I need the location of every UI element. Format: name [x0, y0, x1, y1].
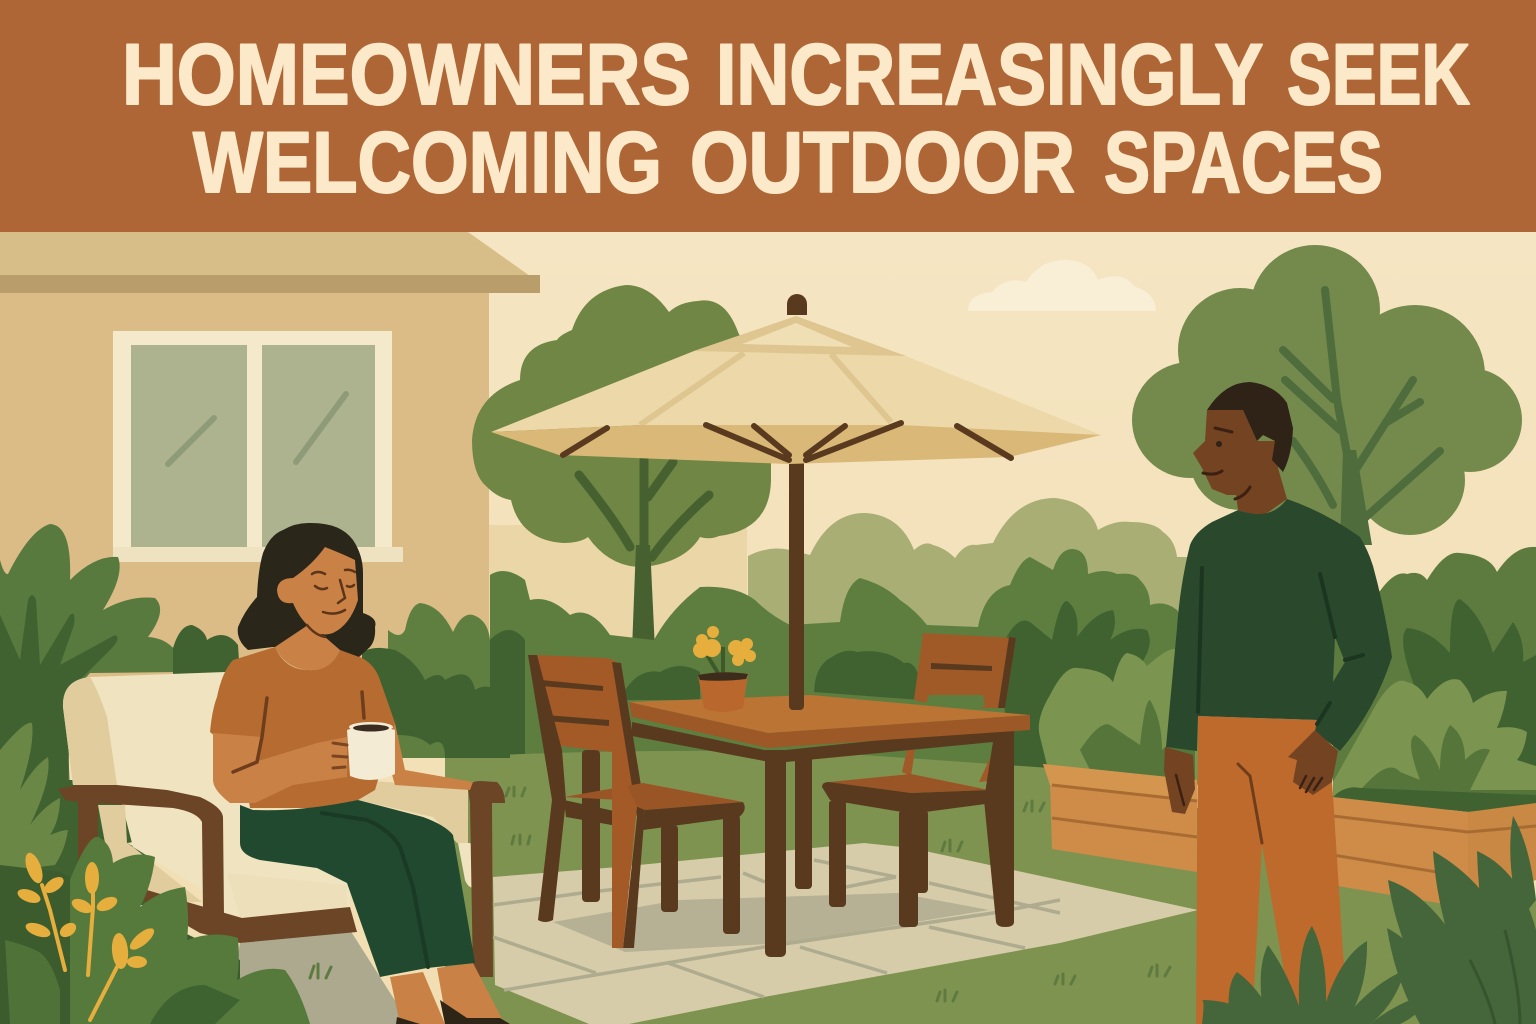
tree behind umbrella — [472, 285, 771, 650]
hair — [238, 523, 376, 658]
chair back — [914, 633, 1016, 708]
mug — [347, 722, 395, 780]
title banner — [0, 0, 1536, 232]
foreground plants right — [1202, 816, 1536, 1024]
foreground plants left — [0, 837, 310, 1024]
table top — [629, 695, 1030, 733]
woman — [210, 523, 510, 1024]
patio — [493, 843, 1198, 1024]
left bushes — [0, 524, 240, 905]
roof fascia — [0, 275, 540, 293]
raised planter beds — [1043, 764, 1536, 905]
light bush left of man — [1039, 649, 1200, 785]
table edge — [629, 702, 1030, 748]
dark leaves on right hedge — [1403, 599, 1536, 810]
right hedge — [1333, 547, 1536, 810]
hair — [1207, 382, 1293, 472]
armchair frame — [58, 785, 224, 917]
yellow sprigs — [16, 851, 157, 1020]
facial features — [307, 570, 355, 637]
bush beside woman — [362, 603, 510, 758]
head and neck — [1193, 410, 1287, 518]
trousers — [1196, 716, 1350, 1024]
man standing — [1164, 382, 1392, 1024]
title: OUTDOOR — [690, 115, 1075, 211]
concrete path at lower left — [225, 930, 410, 1024]
facial features — [1203, 428, 1250, 499]
sweater — [1166, 499, 1392, 751]
flower pot — [693, 626, 756, 712]
shirt seams — [233, 692, 364, 772]
table — [582, 690, 1030, 957]
arm far — [385, 723, 473, 790]
title: SEEK — [1287, 27, 1470, 123]
house wall — [0, 292, 489, 692]
title: SPACES — [1104, 115, 1383, 211]
table shadow — [553, 893, 989, 952]
sky background — [0, 232, 1536, 1024]
dark shrubs behind table — [490, 601, 1195, 770]
cloud — [968, 260, 1156, 311]
annex wall — [489, 525, 747, 665]
distant pale hedge — [748, 498, 1200, 660]
mid hedge — [490, 549, 1195, 780]
shoes — [396, 1000, 510, 1024]
arm near — [213, 733, 347, 803]
chair seat — [829, 774, 989, 793]
right tree — [1132, 245, 1522, 545]
arm gap — [1333, 637, 1345, 682]
grass tufts — [310, 787, 1170, 1001]
window — [113, 331, 403, 562]
house — [0, 232, 747, 692]
face — [277, 547, 358, 634]
title: INCREASINGLY — [716, 27, 1262, 123]
chair seat — [564, 783, 743, 810]
shirt — [210, 647, 395, 808]
table legs — [582, 750, 600, 902]
lawn — [445, 751, 1536, 1024]
front left chair — [528, 655, 745, 948]
hands — [1164, 747, 1195, 814]
trousers — [240, 800, 475, 977]
back right chair — [822, 633, 1016, 927]
fingers — [333, 743, 347, 768]
title: WELCOMING — [193, 115, 662, 211]
umbrella pole — [789, 425, 804, 710]
roof — [0, 232, 530, 276]
legs — [390, 963, 505, 1024]
light bush right of man — [1333, 679, 1536, 812]
front chair leg — [612, 752, 637, 948]
title: HOMEOWNERS — [122, 27, 691, 123]
chair back — [537, 655, 640, 800]
armchair — [58, 672, 505, 977]
umbrella — [491, 294, 1101, 464]
skin of neck and chest — [275, 625, 340, 670]
